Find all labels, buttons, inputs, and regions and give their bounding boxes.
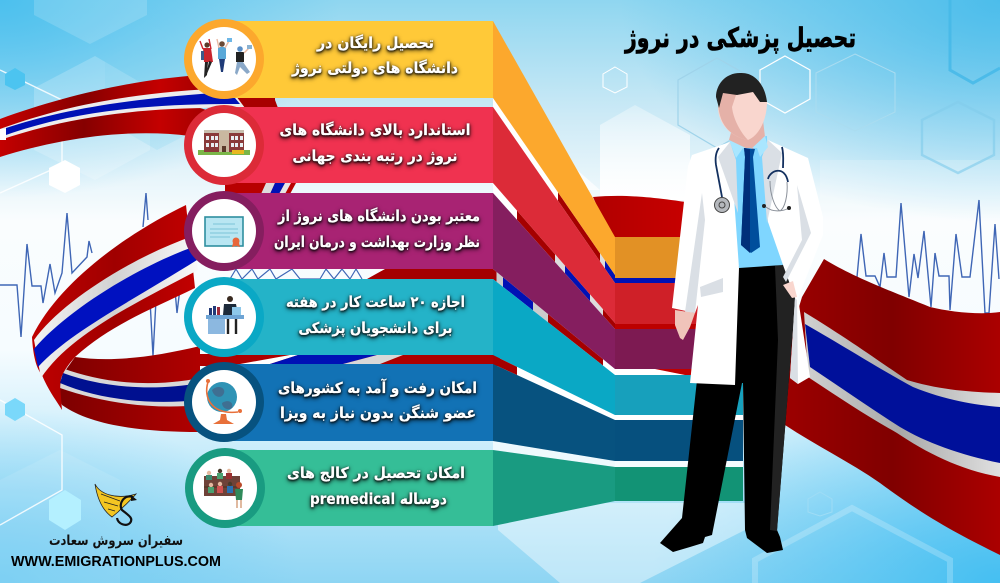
panel: free education: دانشگاه های دولتی نروژ: [291, 59, 458, 77]
title: تحصیل پزشکی در نروژ: [623, 23, 856, 54]
ribbon: left swoosh front band: [32, 205, 198, 410]
panel: degree recognition: معتبر بودن دانشگاه های نروژ از: [277, 207, 480, 225]
lapels: [718, 140, 782, 223]
ECG line left: [0, 193, 181, 356]
ribbon: gap pieces behind bars: [180, 183, 500, 366]
pants: [660, 264, 797, 553]
panel: premedical: امکان تحصیل در کالج های: [287, 464, 465, 482]
panel: university standard: [184, 105, 493, 185]
logo: WWW.EMIGRATIONPLUS.COM: [11, 553, 221, 570]
ECG line right: [857, 200, 999, 313]
panel: schengen travel: امکان رفت و آمد به کشورهای: [278, 379, 477, 397]
panel: work permit: برای دانشجویان پزشکی: [298, 319, 452, 338]
panel: work permit: اجازه ۲۰ ساعت کار در هفته: [286, 293, 465, 311]
ribbon: right: [780, 259, 1000, 555]
icon: office desk: [206, 296, 244, 334]
doctor figure: [660, 73, 823, 553]
icon: certificate: [205, 217, 243, 247]
logo: [11, 484, 221, 570]
3D fold: flat colour bands: [615, 237, 743, 501]
panel: premedical: [185, 448, 493, 528]
stethoscope: [714, 147, 791, 212]
icon: university building: [198, 130, 250, 155]
panel: premedical: دوساله premedical: [310, 490, 447, 508]
3D fold: slanted sides: [493, 21, 615, 526]
panel: university standard: نروژ در رتبه بندی جهانی: [292, 147, 458, 165]
panel: free education: تحصیل رایگان در: [316, 34, 434, 52]
collar: [729, 136, 768, 158]
icon: classroom: [204, 469, 243, 508]
panel: degree recognition: نظر وزارت بهداشت و درمان ایران: [274, 233, 480, 251]
icon: jumping students: [200, 38, 252, 78]
icon: globe: [206, 379, 242, 424]
logo: سفیران سروش سعادت: [49, 533, 183, 549]
ribbon: lower back band: [55, 346, 200, 432]
panel: degree recognition: [184, 191, 493, 271]
head and neck: [716, 73, 767, 152]
tie: [741, 148, 760, 253]
ECG line in gap behind bars: [230, 269, 362, 279]
3D fold: slanted gaps: [493, 98, 615, 467]
panel: schengen travel: عضو شنگن بدون نیاز به ویزا: [280, 404, 476, 422]
ribbon: arc behind doctor: [593, 196, 705, 240]
hands: [675, 281, 797, 340]
white coat: [672, 140, 823, 385]
panel: university standard: استاندارد بالای دانشگاه های: [280, 121, 470, 139]
panel: schengen travel: [184, 362, 493, 442]
panel: free education: [184, 19, 493, 99]
panel: work permit: [184, 277, 493, 357]
icon: winged emblem: [95, 484, 137, 525]
shirt: [730, 136, 783, 268]
ribbon: top left: [0, 75, 278, 157]
